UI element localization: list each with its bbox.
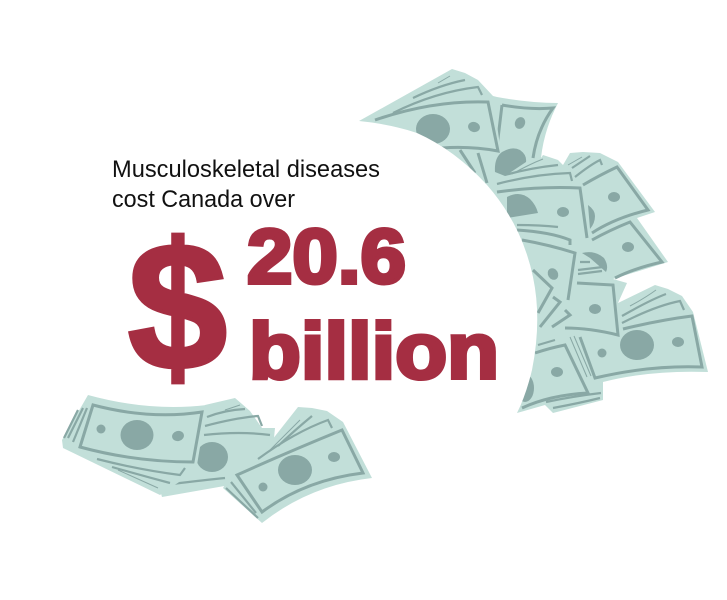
bill: top back right [495, 105, 553, 176]
dollar sign: $ [128, 206, 227, 408]
bill: lower middle [160, 398, 275, 497]
bill: right lower [578, 222, 662, 278]
intro text: Musculoskeletal diseases [112, 156, 380, 183]
bill: upper right fan [568, 156, 648, 233]
headline value [247, 214, 499, 395]
upper money pile [359, 69, 708, 413]
bill: centre left [522, 240, 575, 327]
bill: upper middle fan [497, 159, 587, 245]
bill: lower left fan [62, 395, 207, 495]
white circle panel [60, 105, 537, 560]
intro text [112, 156, 380, 213]
lower money pile [62, 395, 372, 523]
bill: far right fan [570, 290, 702, 378]
bill: top fan main [375, 76, 501, 183]
headline value: billion [249, 306, 499, 395]
bill: centre right [565, 283, 618, 335]
bill: lower right [516, 340, 601, 408]
headline value: 20.6 [247, 214, 406, 300]
bill: lower right fan [223, 407, 372, 523]
pile silhouette [359, 69, 708, 413]
intro text: cost Canada over [112, 186, 295, 213]
